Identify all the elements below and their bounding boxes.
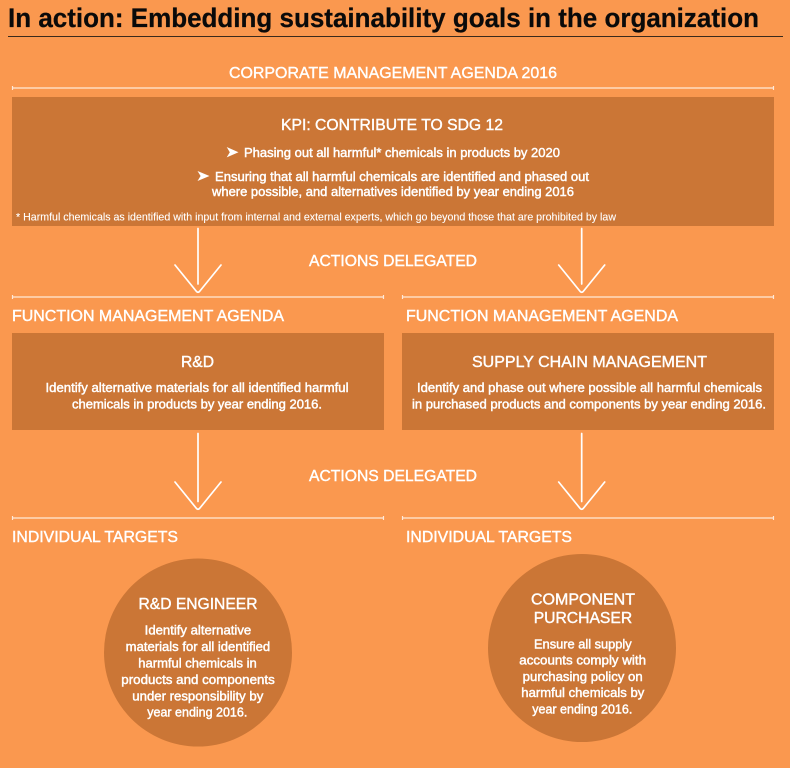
panel: KPI: [12, 97, 774, 226]
KPI bullet two: Ensuring that all harmful chemicals are identified and phased out: [215, 170, 590, 184]
circle: R&D engineer: R&D ENGINEER: [138, 596, 258, 613]
circle: R&D engineer: year ending 2016.: [147, 706, 247, 720]
circle: component purchaser: harmful chemicals by: [521, 686, 645, 700]
arrow: supply chain to purchaser: [559, 434, 605, 509]
KPI heading: KPI: CONTRIBUTE TO SDG 12: [281, 117, 503, 134]
label: actions delegated upper: ACTIONS DELEGATED: [309, 253, 477, 270]
circle: component purchaser: year ending 2016.: [532, 702, 632, 716]
circle: R&D engineer: [104, 558, 292, 746]
heading: corporate management agenda: [12, 65, 774, 90]
heading: function management agenda left: [12, 295, 384, 325]
circle: R&D engineer: under responsibility by: [132, 690, 264, 704]
circle: R&D engineer: materials for all identified: [126, 640, 270, 654]
KPI bullet two: where possible, and alternatives identified by year ending 2016: [211, 185, 574, 199]
heading: individual targets right: [402, 516, 774, 546]
heading: corporate management agenda: CORPORATE MANAGEMENT AGENDA 2016: [229, 65, 557, 82]
circle: component purchaser: accounts comply with: [519, 654, 646, 668]
panel: R&D: R&D: [181, 354, 214, 371]
circle: component purchaser: [488, 554, 676, 742]
KPI bullet two: [198, 170, 590, 199]
heading: individual targets left: [12, 516, 384, 546]
circle: R&D engineer: products and components: [121, 673, 275, 687]
heading: individual targets left: INDIVIDUAL TARGETS: [12, 529, 178, 546]
circle: R&D engineer: Identify alternative: [145, 624, 251, 638]
panel: R&D: Identify alternative materials for all identified harmful: [46, 381, 348, 395]
circle: component purchaser: COMPONENT: [531, 592, 635, 608]
circle: component purchaser: purchasing policy on: [523, 670, 643, 684]
arrow: corporate to supply chain: [559, 228, 605, 292]
panel: supply chain management: [402, 333, 774, 430]
panel: supply chain management: Identify and phase out where possible all harmful chemicals: [417, 381, 762, 395]
panel: supply chain management: in purchased products and components by year ending 2016.: [412, 398, 766, 412]
heading: function management agenda left: FUNCTION MANAGEMENT AGENDA: [12, 308, 284, 325]
arrow: corporate to R&D: [175, 228, 221, 292]
label: actions delegated lower: ACTIONS DELEGATED: [309, 468, 477, 485]
heading: function management agenda right: [402, 295, 774, 325]
panel: supply chain management: SUPPLY CHAIN MANAGEMENT: [472, 354, 707, 371]
heading: individual targets right: INDIVIDUAL TARGETS: [406, 529, 572, 546]
KPI footnote: * Harmful chemicals as identified with input from internal and external experts, which go beyond those that are prohibited by law: [16, 212, 616, 224]
arrow: R&D to engineer: [175, 434, 221, 509]
heading: function management agenda right: FUNCTION MANAGEMENT AGENDA: [406, 308, 678, 325]
circle: R&D engineer: harmful chemicals in: [138, 656, 257, 670]
circle: component purchaser: Ensure all supply: [534, 637, 632, 651]
title: In action: Embedding sustainability goals in the organization: [8, 3, 759, 33]
panel: R&D: chemicals in products by year ending 2016.: [72, 398, 322, 412]
KPI bullet one: Phasing out all harmful* chemicals in products by 2020: [244, 146, 560, 160]
circle: component purchaser: PURCHASER: [534, 610, 632, 627]
panel: R&D: [12, 333, 384, 430]
